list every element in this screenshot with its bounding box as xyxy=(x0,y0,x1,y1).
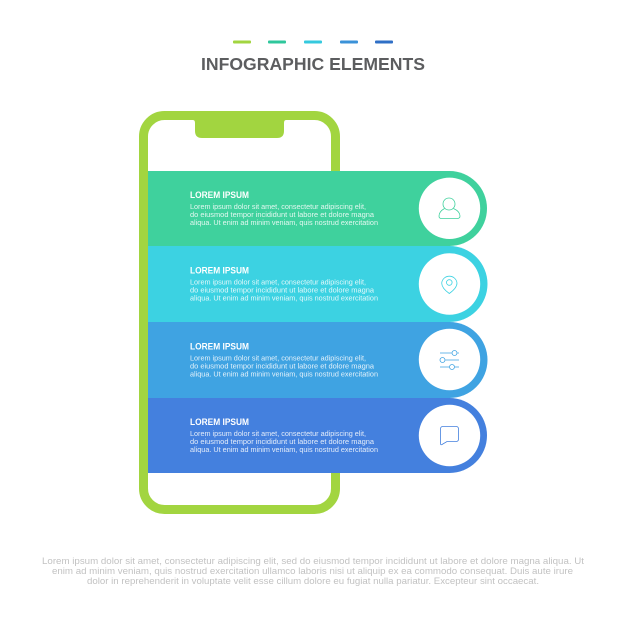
footer text: enim ad minim veniam, quis nostrud exercitation ullamco laboris nisi ut aliquip ex ea commodo consequat. Duis aute irure xyxy=(52,566,573,576)
text block 1 xyxy=(190,204,378,227)
text block 1: aliqua. Ut enim ad minim veniam, quis nostrud exercitation xyxy=(190,220,378,227)
decorative colored dashes xyxy=(233,40,393,44)
footer text xyxy=(42,556,584,586)
text block 3: aliqua. Ut enim ad minim veniam, quis nostrud exercitation xyxy=(190,372,378,378)
text block 4: do eiusmod tempor incididunt ut labore et dolore magna xyxy=(190,439,374,446)
panel: step 3 xyxy=(148,322,488,398)
panel: step 1 xyxy=(148,171,487,246)
footer text: dolor in reprehenderit in voluptate velit esse cillum dolore eu fugiat nulla pariatur. Excepteur sint occaecat. xyxy=(87,576,539,586)
text block 2: aliqua. Ut enim ad minim veniam, quis nostrud exercitation xyxy=(190,296,378,302)
icon circle 1 xyxy=(419,178,480,239)
icon: speech bubble xyxy=(440,426,458,445)
panel: step 2 xyxy=(148,246,488,322)
heading 1: LOREM IPSUM xyxy=(190,190,249,200)
icon: location pin xyxy=(442,276,457,294)
icon circle 2 xyxy=(419,253,480,315)
text block 3 xyxy=(190,356,378,378)
text block 4: aliqua. Ut enim ad minim veniam, quis nostrud exercitation xyxy=(190,447,378,454)
heading 3: LOREM IPSUM xyxy=(190,342,249,352)
icon circle 4 xyxy=(419,405,480,466)
text block 1: Lorem ipsum dolor sit amet, consectetur adipiscing elit, xyxy=(190,204,366,211)
panel: step 4 xyxy=(148,398,487,473)
title: INFOGRAPHIC ELEMENTS xyxy=(201,54,425,74)
icon: person xyxy=(439,198,460,218)
text block 2: do eiusmod tempor incididunt ut labore et dolore magna xyxy=(190,288,374,294)
text block 2 xyxy=(190,280,378,302)
heading 4: LOREM IPSUM xyxy=(190,417,249,427)
phone notch xyxy=(193,120,286,138)
text block 4: Lorem ipsum dolor sit amet, consectetur adipiscing elit, xyxy=(190,431,366,438)
text block 3: do eiusmod tempor incididunt ut labore et dolore magna xyxy=(190,364,374,370)
text block 3: Lorem ipsum dolor sit amet, consectetur adipiscing elit, xyxy=(190,356,366,362)
heading 2: LOREM IPSUM xyxy=(190,266,249,276)
phone outline xyxy=(144,116,336,510)
icon: sliders xyxy=(440,350,459,370)
icon circle 3 xyxy=(419,329,480,390)
text block 1: do eiusmod tempor incididunt ut labore et dolore magna xyxy=(190,212,374,219)
text block 2: Lorem ipsum dolor sit amet, consectetur adipiscing elit, xyxy=(190,280,366,286)
text block 4 xyxy=(190,431,378,454)
footer text: Lorem ipsum dolor sit amet, consectetur adipiscing elit, sed do eiusmod tempor incididunt ut labore et dolore magna aliqua. Ut xyxy=(42,556,584,566)
